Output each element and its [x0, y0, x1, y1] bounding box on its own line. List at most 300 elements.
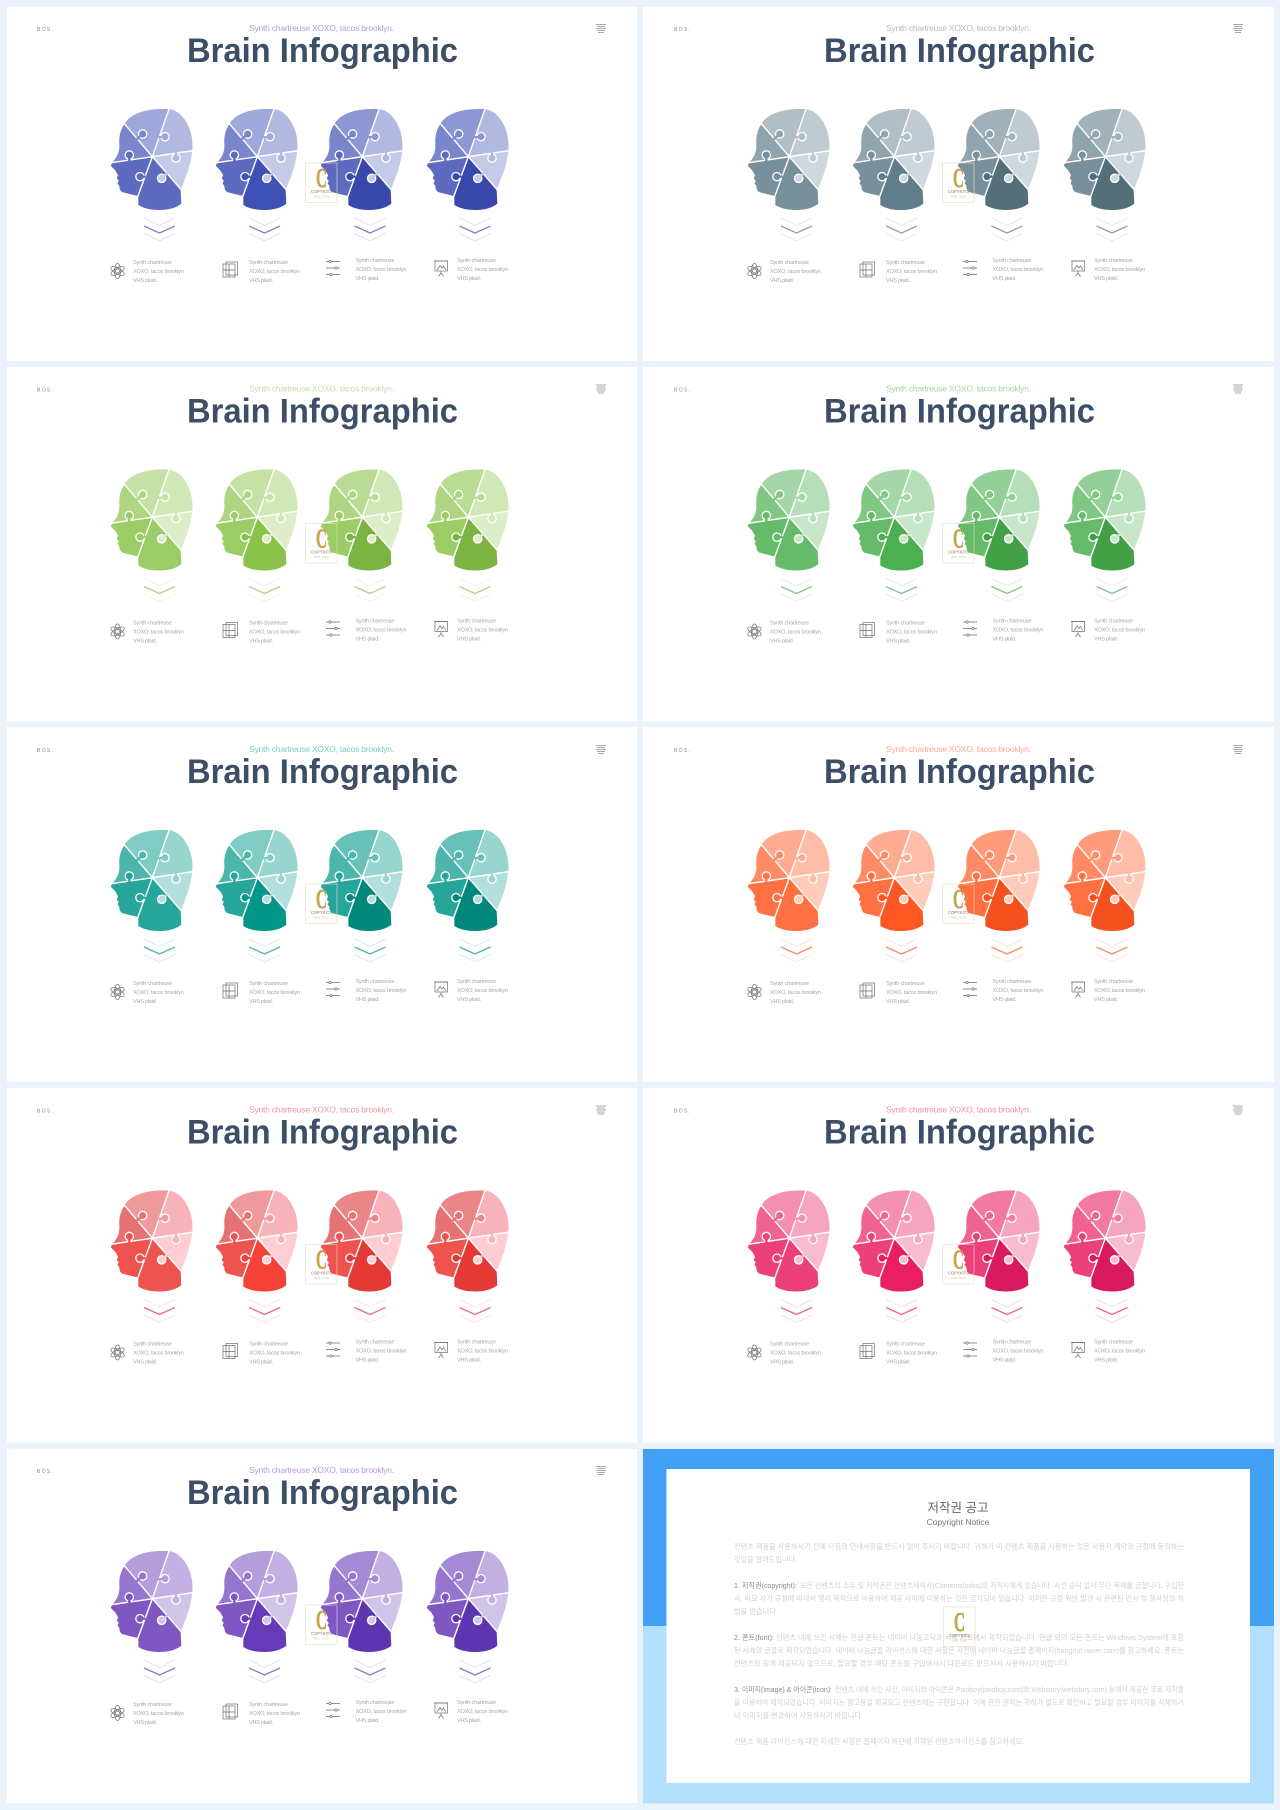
label 2: VHS plaid.: [249, 278, 273, 284]
watermark: C: [316, 1605, 327, 1635]
label 3: VHS plaid.: [356, 276, 380, 282]
label 3: [992, 979, 1044, 1003]
head 1: [747, 108, 830, 211]
label 4: VHS plaid.: [1094, 1358, 1118, 1364]
watermark: COPYKITS: [311, 1270, 332, 1276]
label 3: Synth chartreuse: [992, 258, 1032, 264]
watermark: C: [316, 524, 327, 554]
label 3: VHS plaid.: [356, 1718, 380, 1724]
label 4: [457, 1700, 508, 1724]
icon: atom: [747, 1345, 762, 1360]
logo text: BOS.: [674, 27, 690, 33]
panel: deep orange: [643, 727, 1274, 1082]
watermark: [306, 884, 337, 924]
label 4: [457, 258, 508, 282]
paragraph 1: copyright: 벌을 받습니다.: [734, 1606, 778, 1616]
icon: overlapping squares: [223, 983, 238, 998]
label 1: Synth chartreuse: [770, 260, 809, 266]
icon: presentation screen: [1071, 982, 1085, 998]
label 3: [356, 1340, 406, 1364]
chevrons 2: [886, 578, 917, 602]
icon: atom: [110, 624, 125, 639]
label 2: XOXO, tacos brooklyn: [249, 269, 300, 275]
paragraph 3: images and icons: 3. 이미지(image) & 아이콘(icon):: [734, 1684, 832, 1694]
label 1: VHS plaid.: [133, 1720, 157, 1726]
label 3: [992, 258, 1044, 282]
chevrons 2: [886, 1300, 917, 1322]
label 2: XOXO, tacos brooklyn: [886, 990, 937, 996]
label 2: XOXO, tacos brooklyn: [886, 630, 937, 636]
paragraph 3: images and icons: 을 이용하여 제작되었습니다. 이미지는 참고용일 제공되고 컨텐츠에는 구현합니다. 이에 관한 권리는 귀하가 별도로 확인하고 필요할 경우 이미지를 삭제하거: [734, 1697, 1184, 1707]
paragraph 2: fonts: 된 서체와 글꼴로 제작되었습니다. 네이버 나눔글꼴 라이선스에 대한 사항은 사전에 네이버 나눔글꼴 홈페이지(hangeul.naver.com)를 참고하세요. 폰트는: [734, 1645, 1184, 1655]
label 1: XOXO, tacos brooklyn: [133, 630, 184, 636]
panel background: [7, 727, 637, 1082]
panel: purple: [7, 1449, 637, 1803]
label 4: Synth chartreuse: [1094, 1340, 1133, 1346]
chevrons 4: [1096, 1300, 1128, 1322]
subtitle: Synth chartreuse XOXO, tacos brooklyn.: [249, 384, 394, 394]
icon: overlapping squares: [860, 622, 874, 638]
chevrons 1: [144, 578, 175, 602]
label 3: XOXO, tacos brooklyn: [356, 988, 406, 994]
chevrons 2: [249, 578, 280, 602]
head 1: [110, 1190, 193, 1292]
label 1: [133, 620, 184, 644]
label 3: [356, 618, 406, 642]
chevrons 4: [460, 1300, 490, 1322]
paragraph 3: images and icons: 나 이미지를 변경하여 사용하시기 바랍니다.: [734, 1710, 863, 1720]
watermark: [944, 1607, 975, 1646]
chevrons 3: [354, 939, 386, 962]
label 4: VHS plaid.: [457, 276, 481, 282]
label 1: VHS plaid.: [770, 1360, 794, 1366]
chevrons 1: [781, 939, 812, 962]
head 4: [1063, 469, 1146, 571]
title: Brain Infographic: [824, 32, 1095, 70]
label 2: Synth chartreuse: [886, 260, 925, 266]
watermark: REAL TOUR: [951, 194, 966, 198]
panel background: [7, 1088, 637, 1442]
panel: teal: [7, 727, 637, 1082]
head 2: [852, 108, 935, 211]
title: Brain Infographic: [824, 753, 1095, 791]
chevrons 2: [249, 218, 280, 241]
label 2: VHS plaid.: [249, 1360, 273, 1366]
head 4: [426, 1190, 509, 1292]
panel: blue grey: [643, 7, 1274, 361]
label 3: Synth chartreuse: [992, 1340, 1032, 1346]
icon: sliders: [963, 621, 977, 636]
label 4: XOXO, tacos brooklyn: [457, 1709, 508, 1715]
watermark: [306, 163, 337, 202]
label 3: Synth chartreuse: [356, 618, 394, 624]
label 4: Synth chartreuse: [457, 1340, 496, 1346]
icon: atom: [110, 1345, 125, 1360]
head 3: [957, 108, 1040, 211]
head 4: [1063, 108, 1146, 211]
title: Brain Infographic: [187, 392, 458, 430]
logo text: BOS.: [37, 388, 53, 394]
label 3: Synth chartreuse: [356, 1340, 394, 1346]
icon: presentation screen: [434, 261, 448, 276]
subtitle: Synth chartreuse XOXO, tacos brooklyn.: [886, 1104, 1031, 1114]
label 4: VHS plaid.: [457, 1718, 481, 1724]
label 4: XOXO, tacos brooklyn: [457, 628, 508, 634]
watermark: C: [954, 1607, 965, 1637]
chevrons 1: [781, 218, 812, 241]
watermark: COPYKITS: [311, 1631, 332, 1636]
chevrons 3: [354, 218, 386, 241]
label 4: [457, 979, 508, 1003]
label 4: XOXO, tacos brooklyn: [457, 267, 508, 273]
label 3: XOXO, tacos brooklyn: [356, 628, 406, 634]
label 2: VHS plaid.: [886, 278, 910, 284]
head 3: [957, 1190, 1040, 1292]
watermark: REAL TOUR: [314, 1636, 329, 1640]
label 2: Synth chartreuse: [886, 1342, 925, 1348]
watermark: COPYKITS: [948, 189, 969, 194]
title: Brain Infographic: [187, 1114, 458, 1152]
chevrons 2: [249, 1660, 280, 1683]
head 2: [215, 1550, 298, 1653]
icon: menu: [596, 385, 606, 393]
label 2: [249, 620, 300, 644]
watermark: C: [316, 1244, 327, 1274]
label 3: XOXO, tacos brooklyn: [356, 267, 406, 273]
watermark: [306, 524, 337, 563]
watermark: C: [316, 884, 327, 914]
label 2: [886, 260, 937, 284]
watermark: [306, 1244, 337, 1284]
label 1: VHS plaid.: [133, 999, 157, 1005]
watermark: COPYKITS: [948, 550, 969, 554]
label 3: Synth chartreuse: [356, 1700, 394, 1706]
label 3: Synth chartreuse: [992, 618, 1032, 624]
head 4: [426, 829, 509, 932]
head 2: [215, 829, 298, 932]
icon: atom: [747, 984, 762, 1000]
icon: menu: [596, 24, 606, 32]
label 2: [886, 981, 937, 1005]
head 4: [1063, 829, 1146, 932]
icon: sliders: [963, 981, 977, 997]
chevrons 1: [781, 1300, 812, 1322]
label 4: XOXO, tacos brooklyn: [1094, 267, 1145, 273]
label 1: XOXO, tacos brooklyn: [133, 990, 184, 996]
paragraph 2: fonts: 컨텐츠와 함께 제공되지 않으므로, 필요할 경우 해당 폰트를 구입하셔서 다운로드 받으셔서 사용하시기 바랍니다.: [734, 1658, 1069, 1668]
icon: presentation screen: [1071, 622, 1085, 637]
icon: presentation screen: [1071, 1342, 1085, 1358]
icon: atom: [110, 1706, 125, 1720]
label 1: VHS plaid.: [133, 278, 157, 284]
label 1: VHS plaid.: [770, 638, 794, 644]
watermark: REAL TOUR: [951, 1276, 966, 1280]
label 4: XOXO, tacos brooklyn: [1094, 628, 1145, 634]
label 1: XOXO, tacos brooklyn: [133, 1350, 184, 1356]
label 2: Synth chartreuse: [886, 981, 925, 987]
head 1: [747, 829, 830, 932]
watermark: COPYKITS: [311, 189, 332, 194]
head 3: [320, 1190, 403, 1292]
chevrons 4: [460, 939, 490, 962]
paragraph 2: fonts: 2. 폰트(font):: [734, 1633, 774, 1642]
chevrons 1: [781, 578, 812, 602]
label 1: Synth chartreuse: [133, 1342, 172, 1348]
watermark: REAL TOUR: [952, 1638, 967, 1642]
chevrons 4: [1096, 939, 1128, 962]
chevrons 3: [992, 218, 1022, 241]
icon: menu: [1233, 385, 1243, 393]
label 1: Synth chartreuse: [770, 1342, 809, 1348]
label 4: [1094, 979, 1145, 1003]
watermark: REAL TOUR: [951, 555, 966, 559]
chevrons 4: [460, 218, 490, 241]
panel: copyright notice: [643, 1449, 1274, 1804]
watermark: REAL TOUR: [314, 1276, 329, 1280]
head 2: [852, 829, 935, 932]
label 1: Synth chartreuse: [133, 1702, 172, 1708]
paragraph 1: copyright: 사, 비요 사가 규정에 따라서 영리 목적으로 이용하여 제공 사이에 이용하는 것은 금지되어 있습니다. 이러한 규정 위반 발견 시 관련된 민사 및 형사상의 처: [734, 1593, 1184, 1603]
chevrons 2: [886, 218, 917, 241]
icon: presentation screen: [434, 622, 448, 637]
label 2: XOXO, tacos brooklyn: [249, 630, 300, 636]
watermark: C: [316, 163, 327, 193]
label 4: Synth chartreuse: [1094, 258, 1133, 264]
watermark: [942, 524, 974, 563]
label 1: XOXO, tacos brooklyn: [770, 269, 821, 275]
label 2: VHS plaid.: [886, 638, 910, 644]
icon: presentation screen: [434, 982, 448, 998]
watermark: C: [953, 524, 964, 554]
watermark: [306, 1605, 337, 1644]
chevrons 3: [992, 1300, 1022, 1322]
paragraph 3: images and icons: 컨텐츠 내에 쓰인 사진, 이미지와 아이콘은 Pixoboy(pixoboy.com)와 Webstory(webstory.com) 등에서 제공한 무료 저작물: [835, 1684, 1184, 1694]
panel background: [7, 7, 637, 361]
label 2: VHS plaid.: [249, 638, 273, 644]
label 2: XOXO, tacos brooklyn: [886, 1350, 937, 1356]
paragraph 2: fonts: [734, 1632, 1184, 1668]
label 3: [992, 618, 1044, 642]
chevrons 4: [460, 1660, 490, 1683]
watermark: COPYKITS: [948, 910, 969, 915]
label 1: VHS plaid.: [133, 1360, 157, 1366]
head 1: [110, 108, 193, 211]
logo text: BOS.: [37, 1469, 53, 1475]
panel background: [7, 1449, 637, 1803]
panel background: [7, 367, 637, 722]
label 4: VHS plaid.: [457, 997, 481, 1003]
chevrons 2: [886, 939, 917, 962]
logo text: BOS.: [37, 27, 53, 33]
watermark: COPYKITS: [311, 910, 332, 915]
label 2: VHS plaid.: [249, 999, 273, 1005]
watermark: [942, 163, 974, 202]
icon: overlapping squares: [860, 983, 874, 998]
subtitle: Synth chartreuse XOXO, tacos brooklyn.: [249, 23, 394, 33]
label 1: XOXO, tacos brooklyn: [133, 1711, 184, 1717]
icon: overlapping squares: [223, 1344, 238, 1358]
intro paragraph: [734, 1541, 1184, 1564]
label 2: VHS plaid.: [886, 999, 910, 1005]
chevrons 2: [249, 1300, 280, 1322]
label 1: [133, 1702, 184, 1726]
label 1: Synth chartreuse: [770, 981, 809, 987]
label 2: VHS plaid.: [249, 1720, 273, 1726]
head 3: [320, 108, 403, 211]
watermark: REAL TOUR: [314, 555, 329, 559]
chevrons 4: [460, 578, 490, 602]
label 1: [770, 260, 821, 284]
panel: indigo: [7, 7, 637, 361]
icon: menu: [596, 1466, 606, 1474]
icon: menu: [1233, 1106, 1243, 1114]
label 3: VHS plaid.: [356, 997, 380, 1003]
icon: overlapping squares: [223, 622, 238, 638]
watermark: COPYKITS: [948, 1270, 969, 1276]
intro paragraph: 컨텐츠 제품을 사용하시기 전에 다음의 안내사항을 반드시 읽어 주시기 바랍니다. 귀하가 이 컨텐츠 제품을 사용하는 것은 사용자 계약과 규정에 동의하는: [734, 1541, 1184, 1551]
icon: sliders: [326, 1342, 340, 1357]
icon: sliders: [963, 260, 977, 276]
chevrons 3: [354, 1660, 386, 1683]
label 3: VHS plaid.: [356, 1358, 380, 1364]
head 2: [852, 1190, 935, 1292]
paragraph 2: fonts: 컨텐츠 내에 쓰인 서체는 한글 폰트는 네이버 나눔고딕과 서체 자료에서 제작되었습니다. 한글 외의 모든 폰트는 Windows System에 포함: [776, 1632, 1184, 1642]
head 2: [852, 469, 935, 571]
label 4: Synth chartreuse: [1094, 979, 1133, 985]
icon: presentation screen: [434, 1703, 448, 1718]
watermark: [942, 884, 974, 924]
label 4: Synth chartreuse: [457, 979, 496, 985]
label 1: XOXO, tacos brooklyn: [133, 269, 184, 275]
chevrons 2: [249, 939, 280, 962]
label 3: VHS plaid.: [356, 636, 380, 642]
icon: overlapping squares: [860, 262, 874, 277]
icon: sliders: [326, 981, 340, 997]
label 3: XOXO, tacos brooklyn: [356, 1348, 406, 1354]
logo text: BOS.: [674, 388, 690, 394]
white notice card: [666, 1469, 1250, 1783]
label 1: XOXO, tacos brooklyn: [770, 1350, 821, 1356]
label 1: Synth chartreuse: [770, 620, 809, 626]
paragraph 3: images and icons: [734, 1684, 1184, 1720]
panel: light green: [7, 367, 637, 722]
icon: overlapping squares: [223, 1704, 238, 1719]
icon: presentation screen: [434, 1342, 448, 1358]
icon: atom: [110, 264, 125, 278]
watermark: C: [953, 884, 964, 914]
chevrons 3: [354, 1300, 386, 1322]
label 2: Synth chartreuse: [249, 620, 288, 626]
label 4: XOXO, tacos brooklyn: [1094, 1348, 1145, 1354]
label 1: VHS plaid.: [770, 278, 794, 284]
label 2: XOXO, tacos brooklyn: [249, 1350, 300, 1356]
label 3: VHS plaid.: [992, 276, 1017, 282]
head 4: [426, 108, 509, 211]
icon: menu: [596, 746, 606, 754]
head 1: [110, 1550, 193, 1653]
label 2: Synth chartreuse: [249, 981, 288, 987]
label 1: [133, 1342, 184, 1366]
label 2: [886, 1342, 937, 1366]
label 4: VHS plaid.: [1094, 997, 1118, 1003]
subtitle: Synth chartreuse XOXO, tacos brooklyn.: [886, 23, 1031, 33]
chevrons 1: [144, 1660, 175, 1683]
logo text: BOS.: [37, 1108, 53, 1114]
chevrons 4: [1096, 218, 1128, 241]
logo text: BOS.: [674, 1108, 690, 1114]
watermark: COPYKITS: [949, 1633, 970, 1638]
label 3: [356, 1700, 406, 1724]
label 3: VHS plaid.: [992, 1358, 1017, 1364]
head 2: [215, 469, 298, 571]
label 4: XOXO, tacos brooklyn: [457, 1348, 508, 1354]
watermark: C: [953, 1244, 964, 1274]
label 2: [886, 620, 937, 644]
label 4: [457, 618, 508, 642]
icon: sliders: [326, 260, 340, 276]
head 3: [957, 829, 1040, 932]
label 3: [356, 979, 406, 1003]
subtitle: Synth chartreuse XOXO, tacos brooklyn.: [886, 744, 1031, 754]
label 4: Synth chartreuse: [457, 1700, 496, 1706]
chevrons 3: [354, 578, 386, 602]
paragraph 1: copyright: 모든 컨텐츠의 소유 및 저작권은 컨텐츠제작사(Contentslooks)의 저작자에게 있습니다. 사전 승낙 없이 무단 복제를 금합니다. 구입한: [800, 1580, 1184, 1590]
label 1: [770, 981, 821, 1005]
label 1: XOXO, tacos brooklyn: [770, 630, 821, 636]
label 2: Synth chartreuse: [249, 1342, 288, 1348]
icon: menu: [596, 1106, 606, 1114]
label 2: Synth chartreuse: [249, 260, 288, 266]
icon: sliders: [326, 1702, 340, 1718]
label 2: XOXO, tacos brooklyn: [249, 1711, 300, 1717]
label 4: [457, 1340, 508, 1364]
notice heading: 저작권 공고: [928, 1501, 988, 1515]
intro paragraph: 것임을 알려드립니다.: [734, 1554, 797, 1564]
icon: atom: [110, 984, 125, 1000]
label 2: Synth chartreuse: [886, 620, 925, 626]
icon: menu: [1233, 746, 1243, 754]
label 4: Synth chartreuse: [1094, 618, 1133, 624]
label 1: VHS plaid.: [770, 999, 794, 1005]
label 1: Synth chartreuse: [133, 260, 172, 266]
label 3: VHS plaid.: [992, 997, 1017, 1003]
label 3: XOXO, tacos brooklyn: [992, 988, 1044, 994]
icon: atom: [747, 624, 762, 639]
paragraph 1: copyright: 1. 저작권(copyright):: [734, 1580, 797, 1590]
blue top band: [643, 1449, 1274, 1626]
logo text: BOS.: [674, 748, 690, 754]
label 3: XOXO, tacos brooklyn: [992, 628, 1044, 634]
head 1: [747, 1190, 830, 1292]
icon: atom: [747, 264, 762, 278]
label 1: [133, 260, 184, 284]
panel background: [643, 727, 1274, 1082]
label 3: VHS plaid.: [992, 636, 1017, 642]
title: Brain Infographic: [187, 32, 458, 70]
panel: red: [7, 1088, 637, 1442]
watermark: REAL TOUR: [314, 194, 329, 198]
panel background: [643, 367, 1274, 722]
label 2: [249, 1702, 300, 1726]
label 4: [1094, 258, 1145, 282]
label 3: Synth chartreuse: [356, 979, 394, 985]
watermark: REAL TOUR: [314, 916, 329, 920]
label 1: [770, 620, 821, 644]
label 4: Synth chartreuse: [457, 618, 496, 624]
closing line: 컨텐츠 제품 라이선스에 대한 자세한 사항은 홈페이지 하단에 기재된 컨텐츠라이선스를 참고하세요.: [734, 1736, 1024, 1746]
label 4: VHS plaid.: [457, 636, 481, 642]
subtitle: Synth chartreuse XOXO, tacos brooklyn.: [249, 744, 394, 754]
